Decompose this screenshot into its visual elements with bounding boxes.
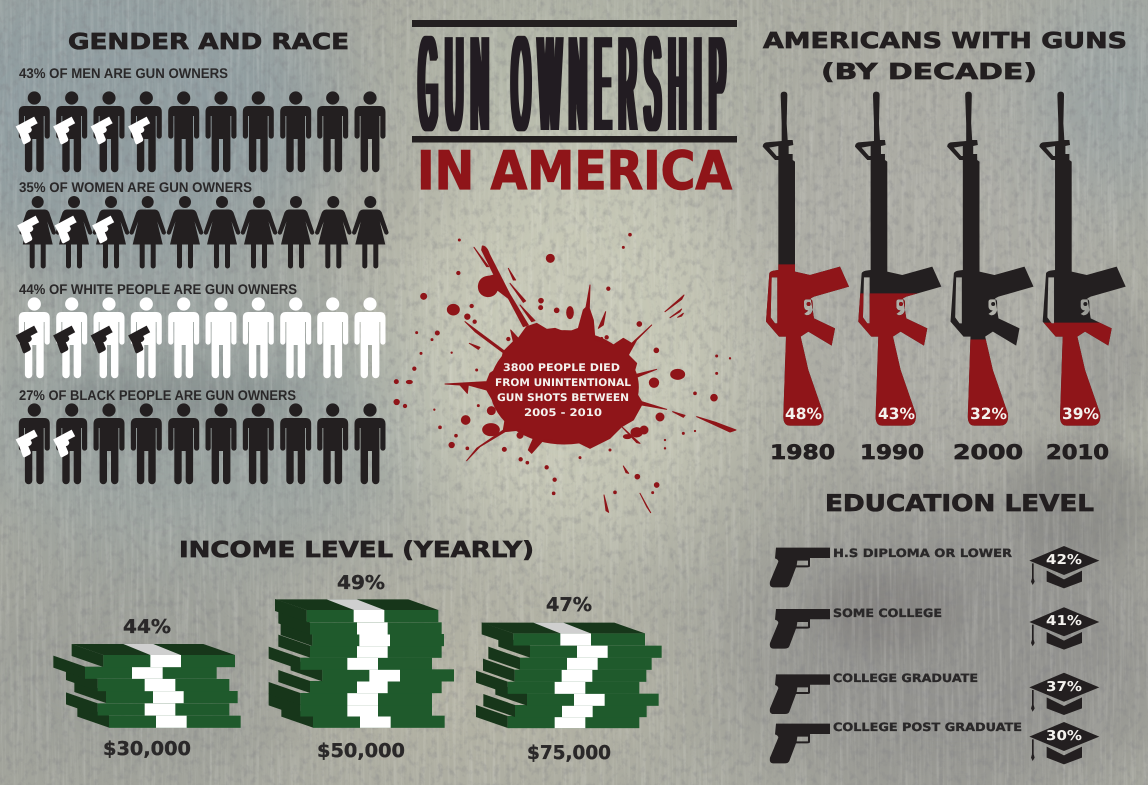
panel: education level (770, 491, 1099, 764)
panel: blood splatter callout (394, 233, 736, 513)
heading: Americans with guns: (BY DECADE) (821, 60, 1037, 85)
pictogram row: men (14, 91, 385, 172)
chart: rifle 2000 32% (947, 92, 1033, 464)
title: IN AMERICA (417, 141, 732, 202)
pictogram row: women (16, 196, 389, 268)
label: white people: 44% OF WHITE PEOPLE ARE GUN OWNERS (19, 281, 297, 297)
panel: income level (53, 538, 662, 764)
row: high school diploma or lower 42% (770, 546, 1099, 588)
row: college post graduate 30%: 30% (1046, 728, 1083, 744)
text: 3800 people died: FROM UNINTENTIONAL (495, 377, 631, 389)
row: some college 41%: 41% (1046, 613, 1083, 629)
chart: money stack $50,000 49%: 49% (337, 572, 385, 594)
panel: gender and race (14, 30, 389, 484)
chart: money stack $75,000 47%: $75,000 (527, 742, 611, 764)
chart: rifle 2000 32%: 2000 (953, 440, 1023, 464)
chart: rifle 1980 48%: 1980 (770, 440, 835, 464)
text: 3800 people died (495, 362, 631, 419)
icon: blood splatter (394, 233, 736, 513)
chart: money stack $75,000 47%: 47% (546, 594, 592, 616)
chart: rifle 1980 48% (763, 92, 849, 464)
chart: money stack $30,000 44% (53, 616, 241, 760)
chart: rifle 1990 43%: 43% (878, 405, 915, 423)
chart: rifle 2010 39%: 2010 (1046, 440, 1109, 464)
chart: rifle 2010 39%: 39% (1062, 405, 1099, 423)
chart: rifle 2000 32%: 32% (970, 405, 1007, 423)
chart: money stack $30,000 44%: $30,000 (103, 738, 191, 760)
row: high school diploma or lower 42%: 42% (1046, 552, 1083, 568)
row: high school diploma or lower 42%: H.S DIPLOMA OR LOWER (833, 546, 1012, 560)
chart: rifle 1990 43% (855, 92, 941, 464)
row: some college 41%: SOME COLLEGE (833, 606, 942, 620)
chart: money stack $50,000 49% (269, 572, 454, 762)
row: college post graduate 30%: COLLEGE POST GRADUATE (833, 720, 1022, 734)
heading: Americans with guns: AMERICANS WITH GUNS (763, 29, 1127, 54)
label: men: 43% OF MEN ARE GUN OWNERS (19, 65, 228, 81)
row: college graduate 37% (770, 671, 1099, 715)
chart: money stack $50,000 49%: $50,000 (317, 740, 405, 762)
row: college graduate 37%: 37% (1046, 679, 1083, 695)
text: 3800 people died: 2005 - 2010 (524, 407, 602, 419)
panel: Americans with guns by decade (763, 29, 1127, 464)
heading: income level: INCOME LEVEL (YEARLY) (179, 538, 534, 563)
row: college post graduate 30% (770, 720, 1099, 764)
chart: money stack $75,000 47% (476, 594, 662, 764)
chart: rifle 2010 39% (1039, 92, 1126, 464)
row: some college 41% (770, 606, 1099, 650)
row: college graduate 37%: COLLEGE GRADUATE (833, 671, 978, 685)
title: GUN OWNERSHIP (419, 8, 734, 159)
text: 3800 people died: 3800 PEOPLE DIED (503, 362, 620, 374)
heading: Americans with guns (763, 29, 1127, 85)
heading: gender and race: GENDER AND RACE (68, 30, 349, 55)
pictogram row: black people (14, 403, 385, 484)
chart: rifle 1990 43%: 1990 (860, 440, 924, 464)
pictogram row: white people (14, 297, 385, 378)
chart: rifle 1980 48%: 48% (785, 405, 822, 423)
chart: money stack $30,000 44%: 44% (123, 616, 171, 638)
heading: education level: EDUCATION LEVEL (825, 491, 1094, 517)
label: black people: 27% OF BLACK PEOPLE ARE GUN OWNERS (19, 387, 296, 403)
text: 3800 people died: GUN SHOTS BETWEEN (497, 392, 629, 404)
label: women: 35% OF WOMEN ARE GUN OWNERS (19, 179, 252, 195)
